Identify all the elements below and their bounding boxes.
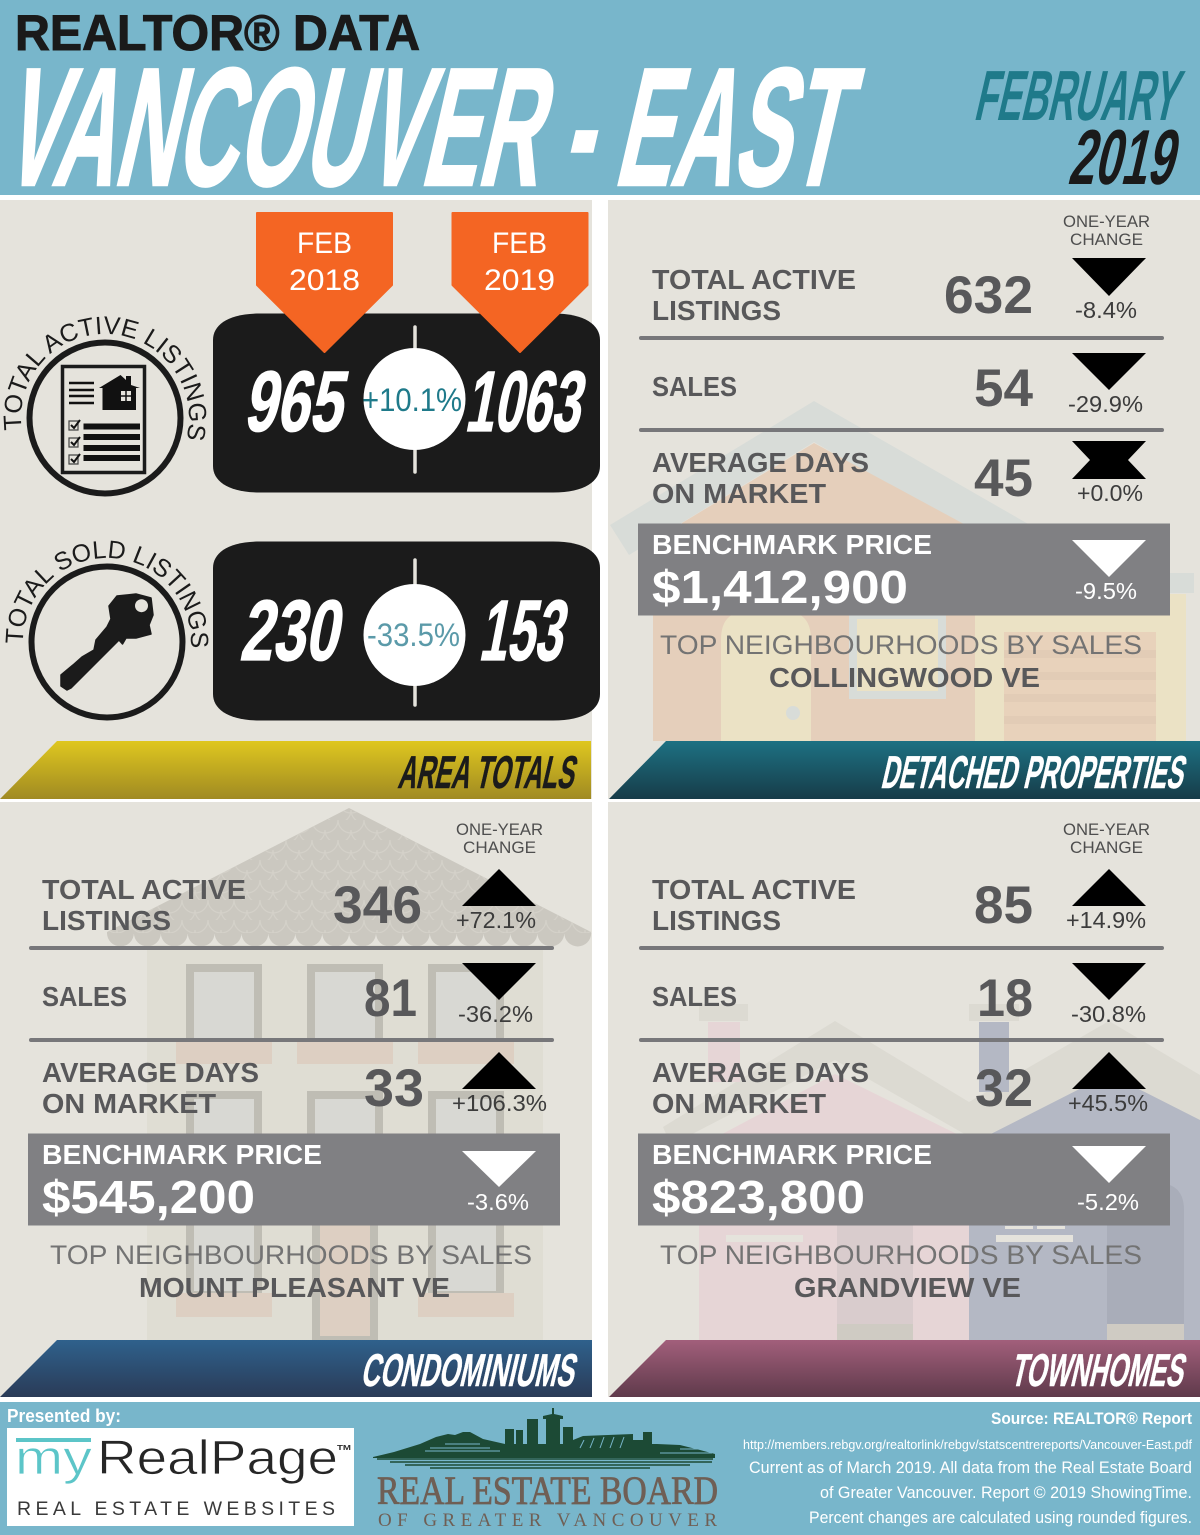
- panel: area totals: [0, 200, 600, 799]
- top neighbourhood: MOUNT PLEASANT VE: [139, 1272, 450, 1303]
- value: sold 2019: 153: [474, 583, 576, 679]
- row: total active listings: [42, 869, 536, 936]
- row: total active listings: 346: [333, 876, 422, 935]
- row: sales: 54: [974, 359, 1034, 418]
- row: sales: -30.8%: [1071, 1001, 1146, 1027]
- top neighbourhood: [50, 1240, 532, 1303]
- row: total active listings: TOTAL ACTIVE: [652, 264, 856, 295]
- value: sold 2018: 230: [235, 583, 352, 679]
- row: total active listings: 85: [974, 876, 1033, 935]
- column heading: one-year change: ONE-YEAR: [1063, 212, 1150, 231]
- column heading: one-year change: CHANGE: [1070, 838, 1143, 857]
- top neighbourhood: [660, 630, 1142, 693]
- benchmark price box: -3.6%: [467, 1189, 529, 1215]
- row: average days on market: 33: [364, 1059, 424, 1118]
- ribbon: Feb 2018: FEB: [297, 227, 352, 260]
- row: average days on market: ON MARKET: [42, 1088, 216, 1119]
- panel: townhomes: [608, 802, 1200, 1397]
- row: average days on market: [42, 1052, 547, 1119]
- top neighbourhood: [660, 1240, 1142, 1303]
- benchmark price box: [638, 524, 1170, 616]
- row: sales: -29.9%: [1068, 391, 1143, 417]
- background illustration: townhouses: [663, 1004, 1200, 1340]
- logo: myRealPage: REAL ESTATE WEBSITES: [17, 1498, 335, 1520]
- row: sales: 18: [977, 969, 1033, 1028]
- change badge: sold listings: [364, 560, 466, 705]
- row: total active listings: +14.9%: [1066, 907, 1146, 933]
- benchmark price box: BENCHMARK PRICE: [652, 529, 932, 560]
- row: sales: -36.2%: [458, 1001, 533, 1027]
- row: total active listings: LISTINGS: [652, 905, 781, 936]
- row: total active listings: LISTINGS: [42, 905, 171, 936]
- banner: condominiums: [0, 1340, 592, 1397]
- skyline: [373, 1408, 715, 1458]
- row: sales: [652, 963, 1146, 1028]
- row: average days on market: 32: [975, 1059, 1033, 1118]
- banner: area totals: AREA TOTALS: [395, 747, 583, 798]
- source text: [743, 1409, 1192, 1527]
- active listings black pill: [213, 314, 600, 492]
- row: total active listings: LISTINGS: [652, 295, 781, 326]
- panel: condominiums: [0, 802, 592, 1397]
- top neighbourhood: COLLINGWOOD VE: [769, 662, 1040, 693]
- column heading: one-year change: [1063, 212, 1150, 249]
- banner: area totals: [0, 741, 591, 799]
- row: average days on market: AVERAGE DAYS: [652, 447, 869, 478]
- ribbon: Feb 2019: 2019: [484, 264, 555, 297]
- row: total active listings: 632: [944, 266, 1033, 325]
- benchmark price box: -9.5%: [1075, 578, 1137, 604]
- benchmark price box: BENCHMARK PRICE: [652, 1139, 932, 1170]
- background illustration: detached house: [610, 401, 1194, 741]
- logo: Real Estate Board of Greater Vancouver: OF GREATER VANCOUVER: [378, 1510, 717, 1531]
- benchmark price box: $1,412,900: [652, 561, 908, 613]
- curved label: total active listings: TOTAL ACTIVE LISTINGS: [4, 316, 206, 440]
- row: average days on market: [652, 1052, 1148, 1119]
- curved label: total sold listings: TOTAL SOLD LISTINGS: [6, 540, 208, 648]
- row: average days on market: AVERAGE DAYS: [42, 1057, 259, 1088]
- panel: detached properties: [608, 200, 1200, 799]
- row: sales: SALES: [652, 371, 737, 402]
- change badge: active listings: [362, 327, 466, 472]
- logo: myRealPage: RealPage: [97, 1432, 338, 1485]
- column heading: one-year change: ONE-YEAR: [1063, 820, 1150, 839]
- heading: REALTOR DATA: REALTOR® DATA: [15, 5, 420, 61]
- row: sales: [652, 353, 1146, 418]
- row: sales: SALES: [42, 981, 127, 1012]
- row: average days on market: 45: [974, 449, 1033, 508]
- column heading: one-year change: [1063, 820, 1150, 857]
- source text: http://members.rebgv.org/realtorlink/rebgv/statscentrereports/Vancouver-East.pdf: [743, 1437, 1192, 1452]
- row: average days on market: [652, 441, 1146, 509]
- value: active 2018: 965: [239, 354, 356, 450]
- column heading: one-year change: CHANGE: [463, 838, 536, 857]
- background illustration: condo building: [107, 808, 591, 1340]
- presented by label: Presented by:: [7, 1406, 121, 1426]
- benchmark price box: -5.2%: [1077, 1189, 1139, 1215]
- ribbon: Feb 2018: 2018: [289, 264, 360, 297]
- logo: Real Estate Board of Greater Vancouver: REAL ESTATE BOARD: [377, 1468, 718, 1513]
- top neighbourhood: TOP NEIGHBOURHOODS BY SALES: [660, 630, 1142, 660]
- row: sales: 81: [364, 969, 417, 1028]
- top neighbourhood: TOP NEIGHBOURHOODS BY SALES: [50, 1240, 532, 1270]
- column heading: one-year change: ONE-YEAR: [456, 820, 543, 839]
- row: sales: [42, 963, 536, 1028]
- column heading: one-year change: [456, 820, 543, 857]
- top neighbourhood: TOP NEIGHBOURHOODS BY SALES: [660, 1240, 1142, 1270]
- ribbon: Feb 2019: [452, 213, 588, 352]
- row: average days on market: +0.0%: [1077, 480, 1143, 506]
- row: total active listings: +72.1%: [456, 907, 536, 933]
- logo: myRealPage: [7, 1428, 354, 1526]
- banner: townhomes: [609, 1340, 1200, 1397]
- header band: [0, 0, 1200, 222]
- row: average days on market: +106.3%: [452, 1090, 547, 1116]
- value: active 2019: 1063: [460, 354, 594, 450]
- benchmark price box: $545,200: [42, 1171, 255, 1223]
- icon: listing document in circle: [30, 342, 180, 494]
- benchmark price box: BENCHMARK PRICE: [42, 1139, 322, 1170]
- row: average days on market: ON MARKET: [652, 1088, 826, 1119]
- row: total active listings: [652, 258, 1146, 326]
- ribbon: Feb 2018: [257, 213, 392, 352]
- row: average days on market: +45.5%: [1068, 1090, 1148, 1116]
- logo: Real Estate Board of Greater Vancouver: [373, 1408, 718, 1531]
- banner: detached properties: [609, 741, 1200, 799]
- column heading: one-year change: CHANGE: [1070, 230, 1143, 249]
- row: average days on market: ON MARKET: [652, 478, 826, 509]
- logo: myRealPage: TM: [337, 1445, 351, 1452]
- footer: [0, 1402, 1200, 1535]
- row: average days on market: AVERAGE DAYS: [652, 1057, 869, 1088]
- row: total active listings: [652, 869, 1146, 936]
- benchmark price box: $823,800: [652, 1171, 865, 1223]
- sold listings black pill: [213, 542, 600, 720]
- row: total active listings: -8.4%: [1075, 297, 1137, 323]
- logo: myRealPage: my: [15, 1432, 92, 1485]
- row: sales: SALES: [652, 981, 737, 1012]
- change badge: sold listings: -33.5%: [367, 617, 460, 653]
- ribbon: Feb 2019: FEB: [492, 227, 547, 260]
- change badge: active listings: +10.1%: [362, 382, 462, 418]
- benchmark price box: [28, 1134, 560, 1226]
- row: total active listings: TOTAL ACTIVE: [652, 874, 856, 905]
- top neighbourhood: GRANDVIEW VE: [794, 1272, 1021, 1303]
- banner: condominiums: CONDOMINIUMS: [358, 1345, 583, 1396]
- icon: key in circle: [32, 566, 182, 718]
- benchmark price box: [638, 1134, 1170, 1226]
- row: total active listings: TOTAL ACTIVE: [42, 874, 246, 905]
